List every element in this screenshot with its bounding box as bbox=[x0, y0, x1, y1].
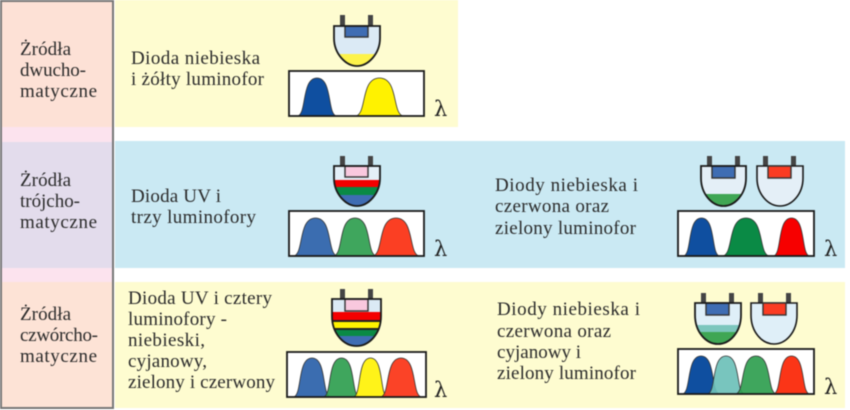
panel: category column bbox=[0, 0, 114, 408]
chart: spectrum blue cyan green red bbox=[678, 349, 814, 394]
text: blue diode and yellow phosphor: i żółty luminofor bbox=[131, 69, 265, 90]
chart: spectrum four peaks bbox=[287, 352, 426, 397]
label: wavelength: λ bbox=[434, 97, 447, 121]
label: wavelength: λ bbox=[824, 237, 837, 261]
label: wavelength: λ bbox=[434, 237, 447, 261]
icon: blue LED with cyan and green phosphors bbox=[692, 293, 744, 345]
text: UV diode and four phosphors: zielony i czerwony bbox=[128, 372, 276, 393]
chart: spectrum blue and yellow bbox=[289, 71, 424, 116]
heading: dichromatic sources: matyczne bbox=[20, 81, 97, 102]
icon: blue LED with green phosphor bbox=[698, 156, 750, 208]
heading: trichromatic sources: Żródła bbox=[20, 170, 72, 191]
text: blue and red diodes with cyan and green phosphors: cyjanowy i bbox=[497, 342, 581, 363]
chart: spectrum blue green red bbox=[289, 211, 424, 256]
icon: blue LED with yellow phosphor bbox=[330, 15, 384, 68]
text: UV diode and four phosphors: luminofory - bbox=[128, 309, 227, 330]
text: blue diode and yellow phosphor: Dioda niebieska bbox=[131, 48, 261, 69]
heading: tetrachromatic sources: czwórcho- bbox=[20, 325, 98, 346]
heading: tetrachromatic sources: Żródła bbox=[20, 304, 72, 325]
heading: dichromatic sources: Żródła bbox=[20, 39, 72, 60]
label: wavelength: λ bbox=[434, 378, 447, 402]
icon: UV LED with four phosphors bbox=[328, 289, 386, 347]
chart: spectrum blue green red narrow bbox=[678, 211, 814, 256]
panel: row 1 dichromatic bbox=[115, 0, 458, 127]
icon: UV LED with three phosphors bbox=[330, 156, 384, 207]
text: blue and red diodes with green phosphor: Diody niebieska i bbox=[495, 175, 638, 196]
label: wavelength: λ bbox=[824, 375, 837, 399]
icon: red LED bbox=[751, 293, 797, 344]
text: UV diode and four phosphors: niebieski, bbox=[128, 330, 205, 351]
text: UV diode and four phosphors: cyjanowy, bbox=[128, 351, 207, 372]
text: blue and red diodes with cyan and green phosphors: zielony luminofor bbox=[497, 363, 637, 384]
heading: tetrachromatic sources: matyczne bbox=[20, 346, 97, 367]
heading: trichromatic sources: trójcho- bbox=[20, 191, 80, 212]
text: UV diode and four phosphors: Dioda UV i cztery bbox=[128, 288, 272, 309]
text: blue and red diodes with cyan and green phosphors: czerwona oraz bbox=[497, 321, 611, 342]
text: blue and red diodes with cyan and green phosphors: Diody niebieska i bbox=[497, 299, 640, 320]
icon: red LED bbox=[757, 156, 803, 206]
text: blue and red diodes with green phosphor: zielony luminofor bbox=[495, 218, 637, 239]
heading: dichromatic sources: dwucho- bbox=[20, 60, 86, 81]
panel: row 2 trichromatic bbox=[115, 141, 845, 268]
text: UV diode and three phosphors: Dioda UV i bbox=[131, 186, 221, 207]
heading: trichromatic sources: matyczne bbox=[20, 212, 97, 233]
text: UV diode and three phosphors: trzy luminofory bbox=[131, 207, 256, 228]
panel: row 3 tetrachromatic bbox=[115, 282, 845, 408]
text: blue and red diodes with green phosphor: czerwona oraz bbox=[495, 196, 609, 217]
